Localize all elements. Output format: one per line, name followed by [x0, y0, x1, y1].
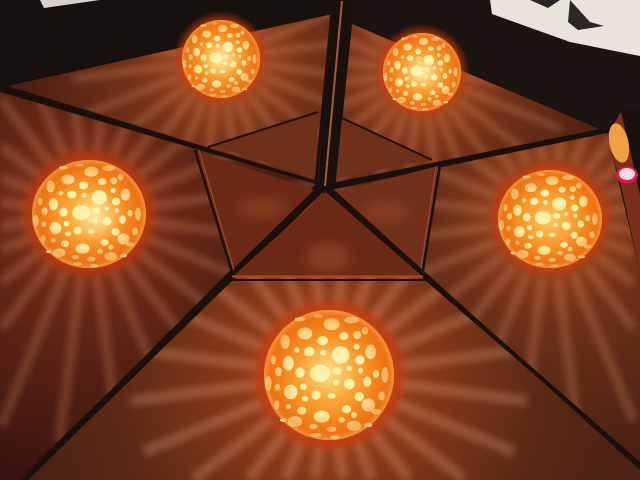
- lamp: left: [19, 147, 159, 281]
- paper scrap top left: [40, 0, 100, 8]
- top black corner region: [0, 0, 333, 85]
- panel: left mirror facet: [0, 92, 316, 480]
- paper with dark print top right: [490, 0, 640, 56]
- panel: bottom wooden floor: [28, 190, 640, 480]
- top right black corner region: [352, 0, 640, 131]
- panel: top-left mirror facet: [8, 14, 330, 182]
- inner reflected facets: [198, 113, 438, 277]
- lamp: top right: [374, 24, 470, 120]
- lamp: right: [486, 158, 614, 280]
- panel: top-right mirror facet: [336, 24, 599, 182]
- lamp: bottom centre: [249, 295, 409, 455]
- lamp: top left: [173, 11, 269, 107]
- small lamp reflection at right edge: [606, 112, 640, 272]
- panel: right mirror facet: [330, 133, 640, 462]
